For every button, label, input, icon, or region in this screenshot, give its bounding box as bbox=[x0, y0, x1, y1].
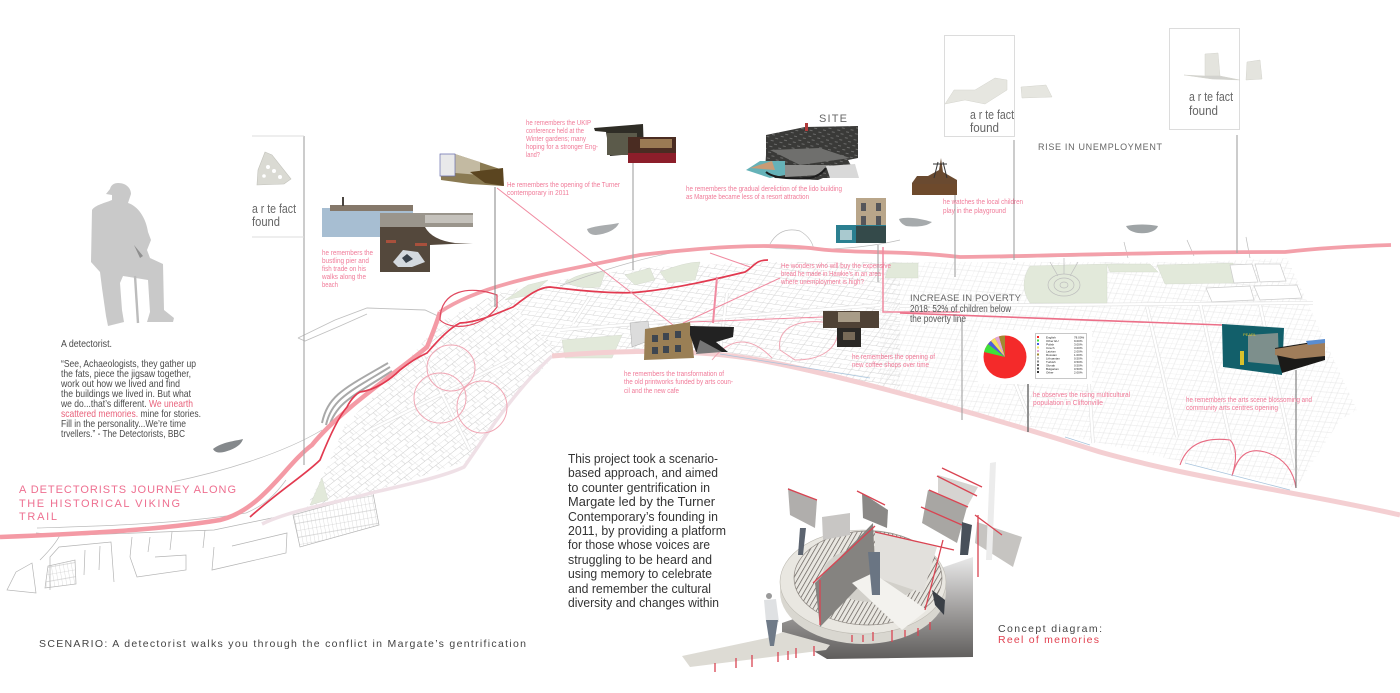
artefact panel: west bbox=[252, 136, 304, 237]
title: journey along the Viking trail: A DETECTORISTS JOURNEY ALONG bbox=[19, 484, 236, 496]
pie legend: Latvian bbox=[1046, 350, 1056, 354]
map: green spaces bbox=[310, 262, 1235, 505]
concept diagram caption bbox=[998, 623, 1102, 646]
text: detectorist quote: trvellers.” - The Detectorists, BBC bbox=[61, 428, 185, 440]
photo collage: lido site bbox=[746, 123, 859, 180]
caption: UKIP conference: hoping for a stronger Eng- bbox=[526, 144, 599, 151]
pie legend: Bulgarian bbox=[1046, 367, 1059, 371]
title: journey along the Viking trail bbox=[19, 484, 236, 523]
text: project description: 2011, by providing a platform bbox=[568, 524, 726, 538]
visitor figures bbox=[764, 522, 972, 646]
concept diagram caption: Concept diagram: bbox=[998, 623, 1102, 635]
caption: printworks: cil and the new cafe bbox=[624, 388, 679, 395]
icon: boat east bbox=[1126, 224, 1158, 233]
route: pink coastal trail (centre and east) bbox=[440, 245, 1391, 312]
caption: coffee shops: he remembers the opening of bbox=[852, 354, 935, 361]
caption: playground bbox=[943, 199, 1023, 215]
poverty statistic bbox=[910, 293, 1022, 325]
text: project description: to counter gentrification in bbox=[568, 481, 710, 495]
caption: arts scene: he remembers the arts scene blossoming and bbox=[1186, 397, 1312, 404]
scenario caption: SCENARIO: A detectorist walks you through the conflict in Margate’s gentrification bbox=[39, 638, 526, 650]
pie legend: 2.00% bbox=[1074, 350, 1083, 354]
artefact panel: east bbox=[1170, 28, 1262, 130]
caption: Turner opening: He remembers the opening of the Turner bbox=[507, 182, 621, 189]
photo collage: Pearl arts venue bbox=[1222, 324, 1325, 375]
map: ornamental garden bbox=[1048, 258, 1080, 296]
artefact panel: centre: a r te fact bbox=[970, 108, 1014, 122]
photo collage: printworks bbox=[630, 321, 734, 360]
pie legend: Russian bbox=[1046, 353, 1057, 357]
map: eastern district streets bbox=[880, 258, 1357, 488]
heading: site: SITE bbox=[819, 113, 847, 125]
text: project description: and remember the cultural bbox=[568, 582, 711, 596]
artefact panel: east: a r te fact bbox=[1189, 90, 1233, 104]
caption: bakery bbox=[780, 263, 891, 286]
text: project description: based approach, and aimed bbox=[568, 466, 718, 480]
heading: rise in unemployment: RISE IN UNEMPLOYMENT bbox=[1038, 142, 1162, 152]
text: detectorist quote: scattered memories. mine for stories. bbox=[61, 408, 201, 420]
caption: pier: bustling pier and bbox=[322, 258, 369, 265]
text: project description: using memory to celebrate bbox=[568, 567, 712, 581]
red reel bars bbox=[715, 468, 1002, 672]
concept diagram: reel of memories bbox=[682, 462, 1022, 672]
caption: Turner opening bbox=[507, 182, 621, 197]
map: Margate street network bbox=[7, 230, 1357, 593]
pie legend: Turkish bbox=[1046, 360, 1056, 364]
route: pink south boundary band (east) bbox=[552, 351, 1400, 515]
stepped ring bbox=[794, 531, 942, 625]
pie legend: 0.50% bbox=[1074, 367, 1083, 371]
map: western district streets bbox=[305, 292, 560, 510]
pie legend: 3.00% bbox=[1074, 342, 1083, 346]
caption: playground: play in the playground bbox=[943, 208, 1006, 215]
map: central district streets bbox=[500, 262, 900, 392]
caption: UKIP conference bbox=[526, 120, 599, 159]
caption: coffee shops bbox=[852, 354, 935, 369]
caption: printworks bbox=[624, 371, 734, 395]
caption: pier: he remembers the bbox=[322, 250, 373, 257]
caption: lido: as Margate became less of a resort attraction bbox=[686, 194, 809, 201]
text: project description: diversity and changes within bbox=[568, 596, 719, 610]
text: detectorist quote: we do...that’s different. We unearth bbox=[60, 398, 193, 410]
artefact caption: a r te fact bbox=[252, 202, 296, 216]
poverty statistic: INCREASE IN POVERTY bbox=[910, 293, 1022, 304]
pie slices: minority shares bbox=[984, 336, 1005, 357]
pie legend: 78.00% bbox=[1074, 336, 1085, 340]
memory captions bbox=[321, 120, 1312, 412]
text: detectorist quote bbox=[60, 338, 201, 440]
pie legend: 2.00% bbox=[1074, 370, 1083, 374]
detectorist silhouette bbox=[91, 183, 174, 326]
caption: pier: fish trade on his bbox=[322, 266, 366, 273]
map: south-west estates bbox=[7, 493, 379, 593]
artefact panel: east: found bbox=[1189, 104, 1218, 118]
caption: bakery: where unemployment is high? bbox=[780, 279, 864, 286]
pie legend: 0.50% bbox=[1074, 356, 1083, 360]
photo collage: bakery bbox=[836, 198, 886, 243]
route: pink coastal trail (west) bbox=[0, 312, 440, 537]
icon: artefact pillars bbox=[1184, 53, 1262, 80]
shaded plinth bbox=[782, 557, 973, 659]
pie legend: Polish bbox=[1046, 342, 1055, 346]
caption: lido bbox=[686, 186, 842, 201]
map: main roads bbox=[370, 293, 1313, 470]
route: pink connector lines bbox=[497, 188, 1222, 325]
icon: boat site bbox=[899, 218, 932, 227]
photo collage: pier and beach bbox=[322, 197, 473, 272]
caption: UKIP conference: land? bbox=[526, 152, 540, 159]
photo: playground bbox=[912, 158, 957, 195]
caption: bakery: bread he made in Hawkie’s in an area bbox=[781, 271, 881, 278]
poverty statistic: 2018: 52% of children below bbox=[910, 304, 1012, 315]
text: project description: This project took a scenario- bbox=[568, 452, 718, 466]
icon: boat central bbox=[587, 223, 619, 235]
central diagonal wall bbox=[815, 523, 875, 627]
photo collage: coffee shops bbox=[823, 311, 879, 347]
caption: printworks: the old printworks funded by arts coun- bbox=[624, 379, 734, 386]
photo collage: Pearl arts venue: PEARL bbox=[1243, 332, 1257, 337]
pie legend: Lithuanian bbox=[1046, 356, 1060, 360]
artefact caption: found bbox=[252, 215, 280, 229]
caption: arts scene: community arts centres opening bbox=[1186, 405, 1278, 412]
icon: artefact shard bbox=[257, 152, 291, 185]
artefact panel: centre bbox=[944, 36, 1052, 136]
text: project description bbox=[568, 452, 726, 610]
poverty statistic: the poverty line bbox=[910, 314, 966, 325]
caption: printworks: he remembers the transformation of bbox=[624, 371, 724, 378]
pie legend: Czech bbox=[1046, 346, 1055, 350]
title: journey along the Viking trail: THE HISTORICAL VIKING bbox=[19, 498, 180, 510]
title: journey along the Viking trail: TRAIL bbox=[19, 511, 57, 523]
caption: UKIP conference: conference held at the bbox=[526, 128, 584, 135]
photo collage: Turner Contemporary bbox=[440, 154, 504, 186]
route: light south boundary band (west) bbox=[262, 356, 552, 524]
ramp bbox=[682, 632, 830, 667]
grey marker poles bbox=[304, 135, 1296, 488]
caption: lido: he remembers the gradual dereliction of the lido building bbox=[686, 186, 842, 193]
hanging panels bbox=[788, 475, 1022, 567]
blue canal edges bbox=[720, 354, 1290, 490]
pie legend: 3.00% bbox=[1074, 346, 1083, 350]
pie legend: Slovak bbox=[1046, 364, 1056, 368]
text: detectorist quote: the fats, piece the jigsaw together, bbox=[61, 368, 191, 380]
icon: boat west bbox=[213, 439, 243, 453]
artefact caption bbox=[252, 202, 296, 229]
caption: UKIP conference: Winter gardens; many bbox=[526, 136, 586, 143]
pie legend: 0.50% bbox=[1074, 360, 1083, 364]
concept diagram caption: Reel of memories bbox=[998, 634, 1099, 646]
map: pier bbox=[298, 308, 440, 341]
caption: pier bbox=[321, 250, 373, 289]
caption: pier: beach bbox=[322, 282, 338, 289]
pie chart: languages spoken bbox=[978, 330, 1092, 384]
caption: multicultural population: population in Cliftonville bbox=[1033, 400, 1103, 407]
caption: bakery: He wonders who will buy the expensive bbox=[781, 263, 891, 270]
artefact panel: centre: found bbox=[970, 121, 999, 135]
caption: playground: he watches the local children bbox=[943, 199, 1023, 206]
concrete mast bbox=[986, 462, 996, 560]
caption: UKIP conference: he remembers the UKIP bbox=[526, 120, 591, 127]
text: project description: struggling to be heard and bbox=[568, 553, 712, 567]
caption: multicultural population: he observes the rising multicultural bbox=[1033, 392, 1130, 399]
text: detectorist quote: the buildings we lived in. But what bbox=[61, 388, 191, 400]
icon: artefact fragments bbox=[945, 78, 1052, 104]
caption: arts scene bbox=[1186, 397, 1312, 412]
caption: multicultural population bbox=[1033, 392, 1130, 407]
pie legend: 0.50% bbox=[1074, 364, 1083, 368]
caption: coffee shops: new coffee shops over time bbox=[852, 362, 929, 369]
boat icons bbox=[213, 218, 1158, 453]
pie legend: Other bbox=[1046, 370, 1054, 374]
caption: Turner opening: contemporary in 2011 bbox=[507, 190, 569, 197]
text: detectorist quote: “See, Achaeologists, they gather up bbox=[61, 358, 196, 370]
route: red walking route bbox=[250, 260, 768, 517]
text: detectorist quote: Fill in the personality...We’re time bbox=[61, 418, 186, 430]
pie legend: 1.00% bbox=[1074, 353, 1083, 357]
text: detectorist quote: A detectorist. bbox=[61, 338, 112, 350]
text: project description: Margate led by the Turner bbox=[568, 495, 715, 509]
map: outer coast lines bbox=[37, 230, 1270, 528]
pie legend: English bbox=[1046, 336, 1056, 340]
pie legend: 9.00% bbox=[1074, 339, 1083, 343]
route: memory circles bbox=[414, 290, 1296, 488]
photo collage: Winter Gardens bbox=[594, 124, 676, 163]
map: road surfaces bbox=[370, 293, 1313, 470]
pie legend bbox=[1036, 334, 1086, 378]
text: project description: for those whose voices are bbox=[568, 538, 710, 552]
caption: pier: walks along the bbox=[321, 274, 366, 281]
text: detectorist quote: work out how we lived and find bbox=[60, 378, 180, 390]
pie legend: Other EU bbox=[1046, 339, 1059, 343]
map: sea wall bbox=[322, 363, 392, 427]
text: project description: Contemporary’s founding in bbox=[568, 510, 718, 524]
map: eastern blocks bbox=[1206, 264, 1302, 302]
drum bbox=[780, 540, 946, 644]
